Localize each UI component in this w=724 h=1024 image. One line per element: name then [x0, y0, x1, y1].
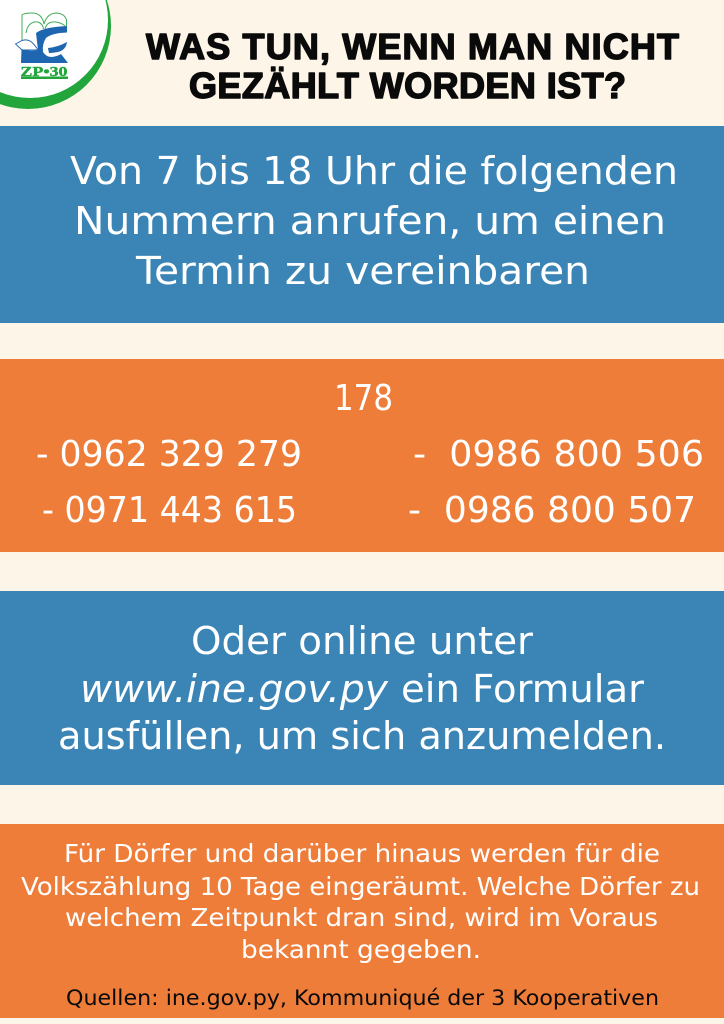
title: GEZÄHLT WORDEN IST?: [189, 65, 626, 106]
panel: villages note and sources: welchem Zeitpunkt dran sind, wird im Voraus: [65, 903, 658, 932]
panel: call instructions: Von 7 bis 18 Uhr die folgenden: [70, 149, 678, 194]
panel: online registration: ausfüllen, um sich anzumelden.: [58, 714, 666, 759]
panel: call instructions: Termin zu vereinbaren: [135, 249, 590, 294]
panel: phone numbers: 178: [334, 378, 393, 419]
panel: villages note and sources: bekannt gegeben.: [241, 935, 481, 964]
panel: villages note and sources: Volkszählung 10 Tage eingeräumt. Welche Dörfer zu: [21, 872, 700, 901]
panel: online registration: www.ine.gov.py: [80, 667, 389, 712]
panel: online registration: Oder online unter: [191, 619, 533, 664]
logo badge: [0, 0, 111, 109]
icon: open book outline: [22, 13, 66, 42]
panel: online registration: [0, 591, 724, 785]
panel: online registration: ein Formular: [401, 667, 644, 712]
panel: phone numbers: [0, 359, 724, 552]
logo wordmark: ZP•30: [20, 65, 68, 80]
title: [146, 26, 679, 106]
panel: phone numbers: - 0962 329 279: [36, 434, 302, 475]
panel: call instructions: [0, 126, 724, 323]
icon: blue dove: [16, 26, 68, 63]
panel: phone numbers: - 0986 800 506: [413, 434, 704, 475]
panel: villages note and sources: Für Dörfer und darüber hinaus werden für die: [64, 839, 660, 868]
panel: phone numbers: - 0971 443 615: [42, 490, 297, 531]
sources line: Quellen: ine.gov.py, Kommuniqué der 3 Kooperativen: [66, 986, 659, 1010]
panel: call instructions: Nummern anrufen, um einen: [74, 199, 666, 244]
panel: villages note and sources: [0, 824, 724, 1018]
panel: phone numbers: - 0986 800 507: [408, 490, 696, 531]
title: WAS TUN, WENN MAN NICHT: [146, 26, 679, 67]
